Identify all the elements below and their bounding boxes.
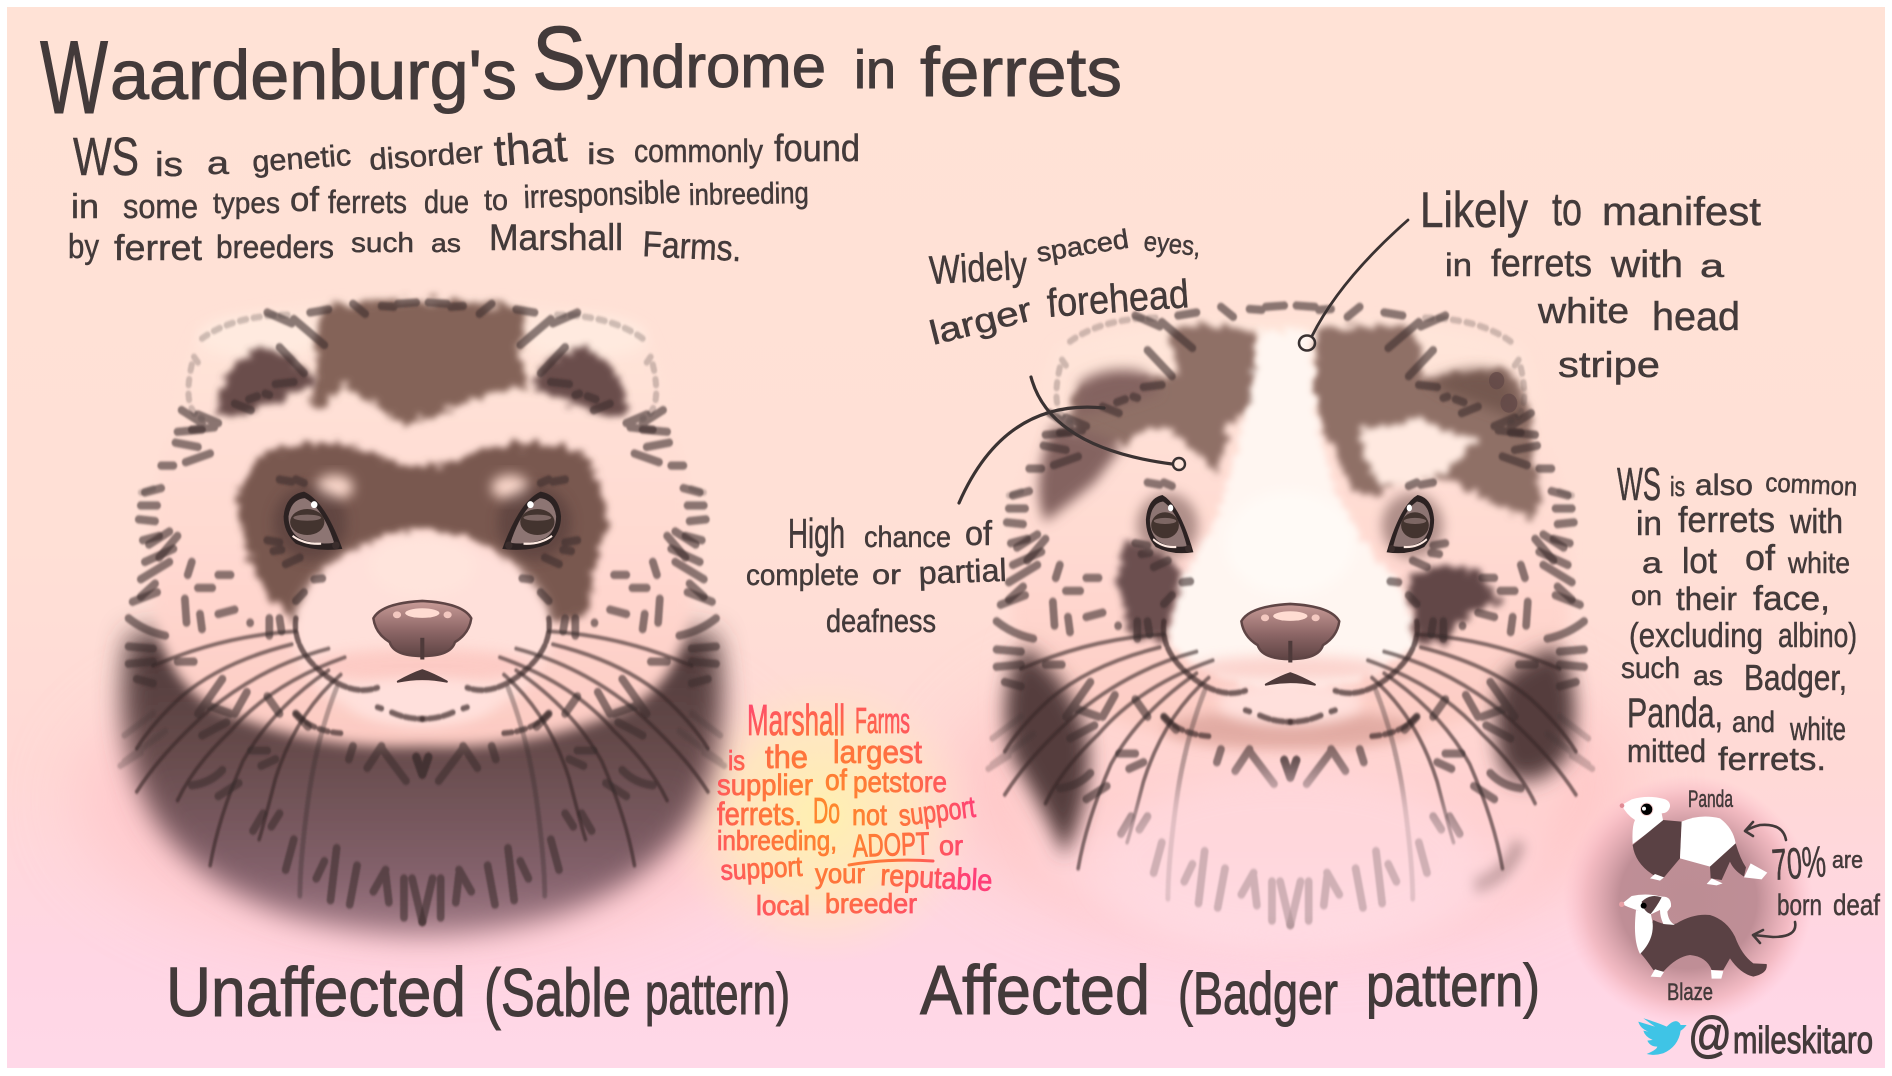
small ferret labels: 70% [1770, 837, 1828, 890]
intro paragraph: Marshall [489, 217, 623, 258]
small ferret labels: Blaze [1667, 979, 1713, 1006]
side note: WS also common: (excluding [1629, 617, 1763, 655]
note: Marshall Farms: support [720, 851, 803, 886]
note: Marshall Farms: largest [833, 734, 922, 770]
intro paragraph: as [431, 228, 461, 258]
note: Marshall Farms: ADOPT [852, 825, 930, 864]
badger fur strokes and whiskers [988, 306, 1592, 925]
side note: WS also common: their [1676, 581, 1737, 617]
annotation: white head stripe: head [1652, 295, 1740, 339]
leader: head stripe [1299, 220, 1408, 350]
caption: affected: Affected [920, 951, 1150, 1029]
intro paragraph: WS [73, 127, 139, 187]
side note: WS also common: mitted [1627, 733, 1706, 769]
dark glow behind small ferrets [1563, 775, 1813, 1025]
annotation: widely spaced eyes: forehead [1046, 272, 1190, 326]
intro paragraph: due [424, 184, 469, 220]
note: Marshall Farms: support [897, 791, 978, 833]
annotation: white head stripe: a [1700, 248, 1724, 284]
handle: @ [1688, 1007, 1732, 1063]
small ferret labels [1667, 786, 1881, 1006]
caption: affected: (Badger [1178, 960, 1338, 1027]
side note: WS also common: as [1693, 660, 1723, 691]
leader: deafness [959, 407, 1104, 503]
badger eyes [1146, 495, 1434, 553]
yellow glow behind Marshall Farms note [662, 665, 982, 965]
side note: WS also common: of [1745, 537, 1776, 578]
annotation: deafness: complete [746, 559, 859, 592]
annotation: deafness: deafness [826, 603, 936, 639]
intro paragraph: disorder [368, 136, 484, 177]
caption: unaffected: (Sable [484, 955, 631, 1031]
note: Marshall Farms [717, 696, 993, 921]
caption: affected: pattern) [1366, 952, 1540, 1019]
intro paragraph: some [123, 188, 198, 226]
icon: blaze ferret [1619, 894, 1767, 979]
note: Marshall Farms: petstore [853, 766, 947, 799]
note: Marshall Farms: ferrets. [717, 796, 802, 832]
note: Marshall Farms: supplier [717, 769, 813, 802]
intro paragraph: such [351, 227, 414, 258]
side note: WS also common: Panda, [1627, 689, 1723, 736]
ferret: unaffected sable [120, 301, 724, 935]
side note: WS also common: in [1636, 505, 1662, 543]
caption: unaffected: pattern) [645, 962, 790, 1027]
ferret: affected badger [988, 306, 1592, 951]
note: Marshall Farms: local [756, 890, 810, 921]
note: Marshall Farms: breeder [825, 888, 917, 919]
annotation: white head stripe: manifest [1602, 190, 1761, 234]
note: Marshall Farms: inbreeding, [717, 825, 837, 856]
intro paragraph: found [774, 128, 860, 170]
note: Marshall Farms: Do [813, 790, 840, 831]
title: W [40, 20, 108, 136]
annotation: widely spaced eyes: spaced [1034, 224, 1131, 268]
annotation: white head stripe: stripe [1558, 344, 1660, 385]
intro paragraph: a [207, 145, 229, 181]
side note: WS also common: and [1732, 706, 1775, 739]
annotation: deafness: High [788, 510, 845, 557]
annotation: deafness: of [965, 515, 993, 553]
note: Marshall Farms: reputable [880, 859, 993, 898]
annotation: widely spaced eyes: larger [926, 291, 1036, 353]
handle [1688, 1007, 1873, 1063]
intro paragraph: irresponsible [523, 174, 681, 215]
title: aardenburg's [110, 36, 517, 114]
annotation: white head stripe: ferrets [1491, 243, 1592, 285]
side note: WS also common: a [1642, 547, 1662, 580]
small ferret labels: deaf [1833, 889, 1881, 922]
caption: unaffected [166, 953, 790, 1031]
intro paragraph: types [213, 187, 280, 220]
title: S [532, 9, 586, 109]
title: yndrome [586, 33, 826, 100]
caption: unaffected: Unaffected [166, 953, 466, 1031]
intro paragraph: Farms. [642, 223, 743, 269]
annotation: deafness [746, 510, 1007, 639]
note: Marshall Farms: Farms [855, 700, 910, 741]
intro paragraph: is [155, 146, 183, 184]
annotation: deafness: or [872, 559, 901, 590]
side note: WS also common: on [1631, 580, 1662, 611]
icon: twitter bird [1638, 1018, 1687, 1055]
side note: WS also common: common [1765, 467, 1858, 502]
intro paragraph: inbreeding [689, 177, 809, 212]
arrow: to blaze [1753, 922, 1795, 943]
annotation: deafness: chance [864, 521, 951, 554]
sable fur strokes and whiskers [120, 303, 724, 922]
intro paragraph: genetic [251, 139, 352, 179]
title: ferrets [920, 33, 1122, 111]
side note: WS also common: Badger, [1744, 657, 1847, 698]
small ferret labels: Panda [1688, 786, 1733, 813]
intro paragraph: is [587, 138, 615, 171]
sable colouring [122, 301, 722, 935]
side note: WS also common: ferrets. [1718, 741, 1826, 777]
badger colouring [1005, 322, 1575, 951]
annotation: widely spaced eyes [926, 224, 1202, 353]
intro paragraph [68, 122, 860, 269]
intro paragraph: commonly [634, 133, 763, 169]
title [40, 9, 1122, 136]
note: Marshall Farms: not [852, 799, 888, 832]
arrow: to panda [1745, 822, 1786, 840]
note: Marshall Farms: is [728, 745, 745, 776]
annotation: deafness: partial [918, 552, 1007, 591]
annotation: white head stripe: in [1445, 247, 1472, 283]
title: in [854, 40, 896, 100]
intro paragraph: ferret [114, 227, 202, 268]
annotation: white head stripe [1420, 182, 1761, 385]
side note: WS also common: such [1621, 652, 1680, 685]
annotation: white head stripe: with [1610, 244, 1683, 286]
badger pale belly wash [1100, 775, 1480, 945]
side note: WS also common: also [1695, 469, 1753, 502]
side note: WS also common: ferrets [1678, 499, 1775, 540]
intro paragraph: by [68, 228, 99, 266]
annotation: white head stripe: to [1552, 183, 1582, 235]
small ferret labels: are [1832, 847, 1863, 874]
side note: WS also common: with [1789, 503, 1843, 541]
side note: WS also common: lot [1682, 540, 1717, 581]
caption: affected [920, 951, 1540, 1029]
note: Marshall Farms: your [815, 858, 865, 889]
intro paragraph: in [71, 188, 99, 226]
side note: WS also common: white [1789, 711, 1846, 747]
side note: WS also common: face, [1753, 580, 1830, 618]
intro paragraph: breeders [216, 229, 334, 265]
side note: WS also common: albino) [1778, 617, 1857, 655]
soft pink glow behind ferrets [75, 640, 1635, 950]
annotation: widely spaced eyes: Widely [928, 244, 1028, 293]
annotation: white head stripe: white [1537, 290, 1629, 331]
intro paragraph: of [290, 181, 320, 219]
side note: WS also common: is [1670, 471, 1685, 502]
note: Marshall Farms: the [765, 739, 808, 775]
icon: panda ferret [1620, 797, 1767, 885]
annotation: white head stripe: Likely [1420, 182, 1528, 238]
side note: WS also common: WS [1617, 458, 1661, 510]
intro paragraph: ferrets [328, 184, 407, 220]
side note: WS also common: white [1787, 547, 1850, 580]
small ferret labels: born [1777, 889, 1822, 922]
intro paragraph: that [492, 122, 569, 176]
annotation: widely spaced eyes: eyes, [1142, 226, 1202, 262]
intro paragraph: to [484, 184, 508, 217]
note: Marshall Farms: or [939, 830, 963, 861]
note: Marshall Farms: Marshall [747, 696, 845, 745]
note: Marshall Farms: of [825, 764, 848, 797]
leader: forehead [1031, 377, 1185, 470]
side note: WS also common [1617, 458, 1858, 777]
